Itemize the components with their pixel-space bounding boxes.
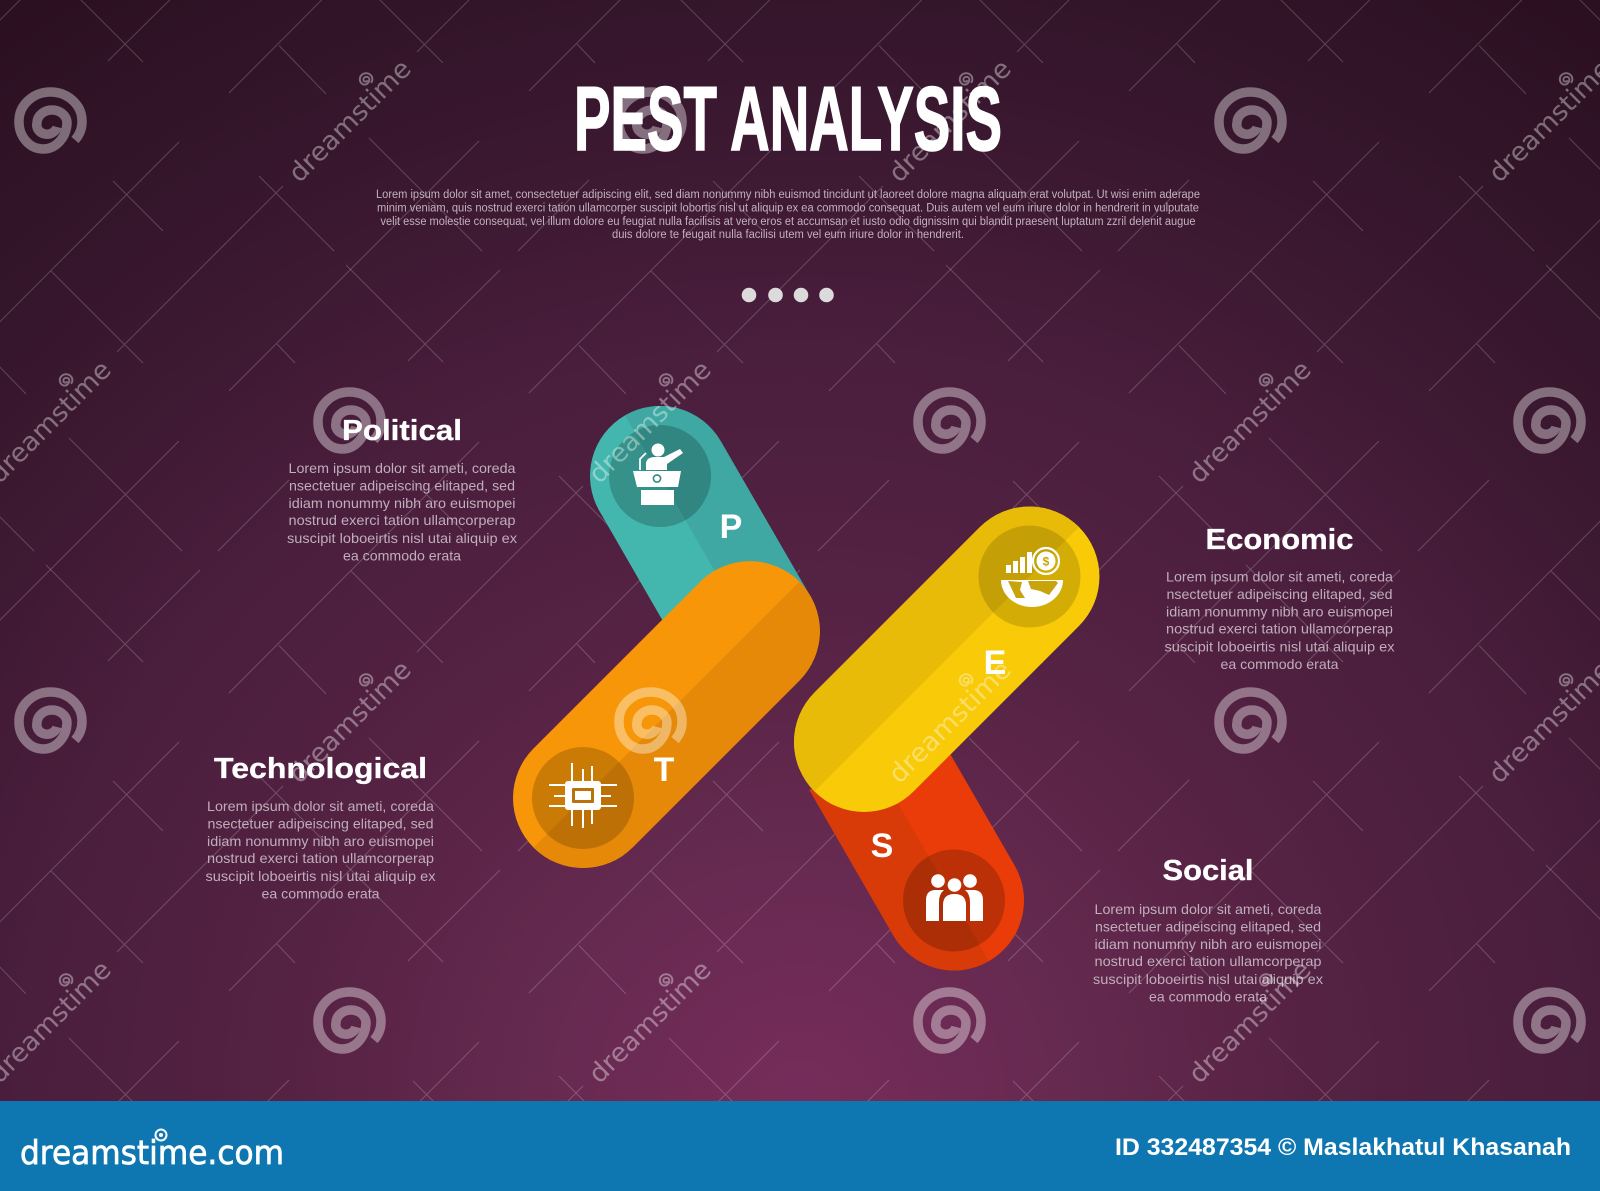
- text block: technological: Lorem ipsum dolor sit ameti, coreda: [207, 798, 434, 814]
- text block: social: Lorem ipsum dolor sit ameti, coreda: [1094, 901, 1322, 917]
- text block: technological: idiam nonummy nibh aro euismopei: [207, 833, 434, 849]
- watermark wordmarks: dreamstime: [283, 655, 418, 790]
- text block: social: nsectetuer adipeiscing elitaped, sed: [1095, 918, 1321, 934]
- text block: technological: Technological: [214, 753, 427, 785]
- intro paragraph: [376, 189, 1200, 241]
- watermark spirals: [19, 92, 1581, 1049]
- text block: social: [1093, 855, 1323, 1004]
- image credit: ID 332487354 © Maslakhatul Khasanah: [1115, 1134, 1571, 1161]
- text block: political: suscipit loboeirtis nisl utai aliquip ex: [287, 530, 517, 546]
- text block: economic: nostrud exerci tation ullamcorperap: [1166, 621, 1393, 637]
- intro paragraph: velit esse molestie consequat, vel illum dolore eu feugiat nulla facilisis at vero eros et accumsan et iusto odio dignissim qui blandit praesent luptatum zzril delenit augue: [380, 216, 1196, 228]
- text block: technological: suscipit loboeirtis nisl utai aliquip ex: [206, 868, 436, 884]
- watermark wordmarks: dreamstime: [583, 355, 718, 490]
- text block: technological: nsectetuer adipeiscing elitaped, sed: [208, 815, 434, 831]
- text block: political: ea commodo erata: [343, 547, 461, 563]
- panel: political capsule: [564, 380, 809, 663]
- panel: technological capsule: [484, 532, 849, 897]
- text block: economic: [1164, 524, 1394, 672]
- text block: social: Social: [1162, 855, 1254, 887]
- letter E: E: [984, 644, 1006, 682]
- text block: social: nostrud exerci tation ullamcorperap: [1094, 953, 1322, 969]
- icon: microchip: [549, 763, 617, 828]
- watermark wordmarks: dreamstime: [883, 54, 1018, 189]
- watermark wordmarks: dreamstime: [1183, 355, 1318, 490]
- icon: growth, coin and globe: [1001, 548, 1063, 607]
- text block: political: Political: [342, 415, 462, 447]
- text block: political: [287, 415, 517, 563]
- footer band: [0, 1101, 1600, 1191]
- footer logo: dreamstime.com: [20, 1133, 284, 1172]
- text block: social: ea commodo erata: [1149, 988, 1267, 1004]
- text block: economic: Lorem ipsum dolor sit ameti, coreda: [1166, 568, 1393, 584]
- text block: technological: ea commodo erata: [262, 885, 380, 901]
- text block: social: suscipit loboeirtis nisl utai aliquip ex: [1093, 971, 1323, 987]
- text block: economic: idiam nonummy nibh aro euismopei: [1166, 603, 1393, 619]
- watermark wordmarks: dreamstime: [883, 655, 1018, 790]
- intro paragraph: duis dolore te feugait nulla facilisi utem vel eum iriure dolor in hendrerit.: [612, 229, 964, 241]
- letter P: P: [720, 508, 742, 546]
- text block: political: Lorem ipsum dolor sit ameti, coreda: [288, 460, 516, 476]
- text block: political: nsectetuer adipeiscing elitaped, sed: [289, 477, 515, 493]
- text block: technological: [206, 753, 436, 901]
- watermark wordmarks: dreamstime: [283, 54, 418, 189]
- title: PEST ANALYSIS: [574, 69, 1002, 170]
- pagination dots: [742, 288, 834, 302]
- text block: economic: Economic: [1206, 524, 1354, 556]
- intro paragraph: minim veniam, quis nostrud exerci tation ullamcorper suscipit lobortis nisl ut aliquip ex ea commodo consequat. Duis autem vel eum iriure dolor in hendrerit in vulputate: [377, 202, 1199, 214]
- text block: political: idiam nonummy nibh aro euismopei: [288, 495, 516, 511]
- icon: group of people: [926, 874, 983, 921]
- watermark wordmarks: dreamstime: [583, 955, 718, 1090]
- watermark wordmarks: dreamstime: [1183, 955, 1318, 1090]
- text block: social: idiam nonummy nibh aro euismopei: [1094, 936, 1322, 952]
- panel: economic capsule: [765, 478, 1128, 841]
- icon: speaker at podium: [633, 444, 683, 505]
- text block: economic: nsectetuer adipeiscing elitaped, sed: [1166, 586, 1392, 602]
- text block: technological: nostrud exerci tation ullamcorperap: [207, 850, 434, 866]
- icon: growth, coin and globe: $: [1043, 554, 1050, 568]
- letter S: S: [871, 827, 893, 865]
- text block: economic: suscipit loboeirtis nisl utai aliquip ex: [1164, 638, 1394, 654]
- intro paragraph: Lorem ipsum dolor sit amet, consectetuer adipiscing elit, sed diam nonummy nibh euismod tincidunt ut laoreet dolore magna aliquam erat volutpat. Ut wisi enim aderape: [376, 189, 1200, 201]
- letter T: T: [654, 751, 675, 789]
- text block: political: nostrud exerci tation ullamcorperap: [288, 512, 516, 528]
- panel: social capsule: [809, 720, 1050, 996]
- text block: economic: ea commodo erata: [1220, 656, 1339, 672]
